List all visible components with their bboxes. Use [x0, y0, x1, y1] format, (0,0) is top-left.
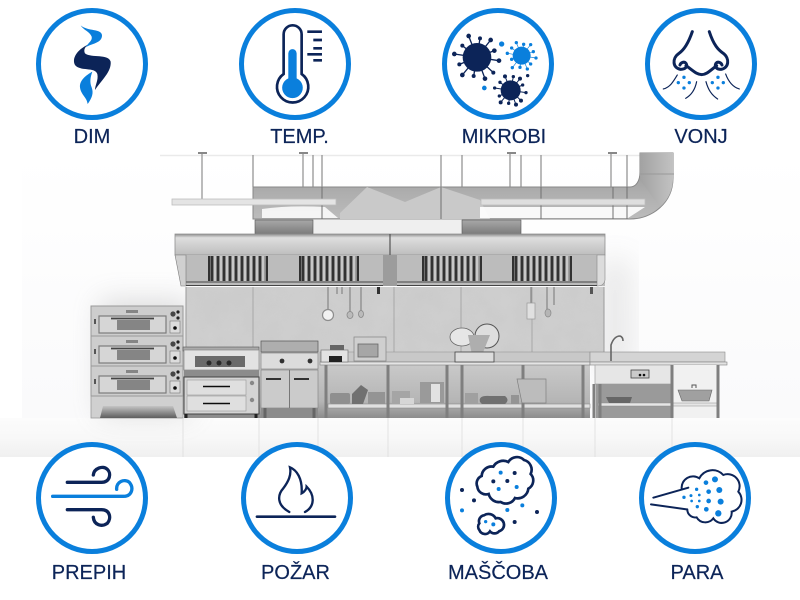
- icon: microbes: [444, 10, 552, 118]
- label: TEMP.: TEMP.: [270, 126, 329, 148]
- duct connectors: [255, 220, 521, 234]
- ceiling rods and ventilation duct: [160, 153, 674, 219]
- floor reflection: [183, 418, 672, 457]
- kitchen illustration: [91, 153, 727, 457]
- countertop appliances: [321, 337, 386, 362]
- icon: DIM: [38, 10, 146, 118]
- icon: flame: [244, 444, 350, 552]
- icon: wind: [38, 444, 146, 552]
- label: DIM: DIM: [74, 126, 110, 148]
- icon: thermometer: [242, 10, 348, 118]
- label: POŽAR: POŽAR: [261, 561, 330, 584]
- icon: grease: [448, 444, 554, 552]
- sink table: [590, 336, 727, 418]
- stacked oven: [91, 306, 183, 418]
- label: MAŠČOBA: MAŠČOBA: [448, 561, 549, 584]
- kitchen photo background band: [0, 153, 800, 457]
- hanging utensils: [322, 287, 593, 320]
- gas range: [183, 347, 259, 418]
- work table and shelves: [320, 352, 590, 418]
- range hood: [175, 234, 605, 286]
- meat slicer: [450, 324, 499, 362]
- backsplash: [186, 287, 604, 418]
- pots on shelves: [330, 379, 546, 404]
- label: PARA: PARA: [671, 562, 724, 584]
- fryer: [261, 341, 318, 418]
- label: MIKROBI: MIKROBI: [462, 126, 546, 148]
- label: PREPIH: PREPIH: [52, 562, 126, 584]
- label: VONJ: VONJ: [674, 126, 728, 148]
- icon: nose: [648, 10, 754, 118]
- icon: steam: [642, 444, 748, 552]
- light bars: [172, 199, 645, 205]
